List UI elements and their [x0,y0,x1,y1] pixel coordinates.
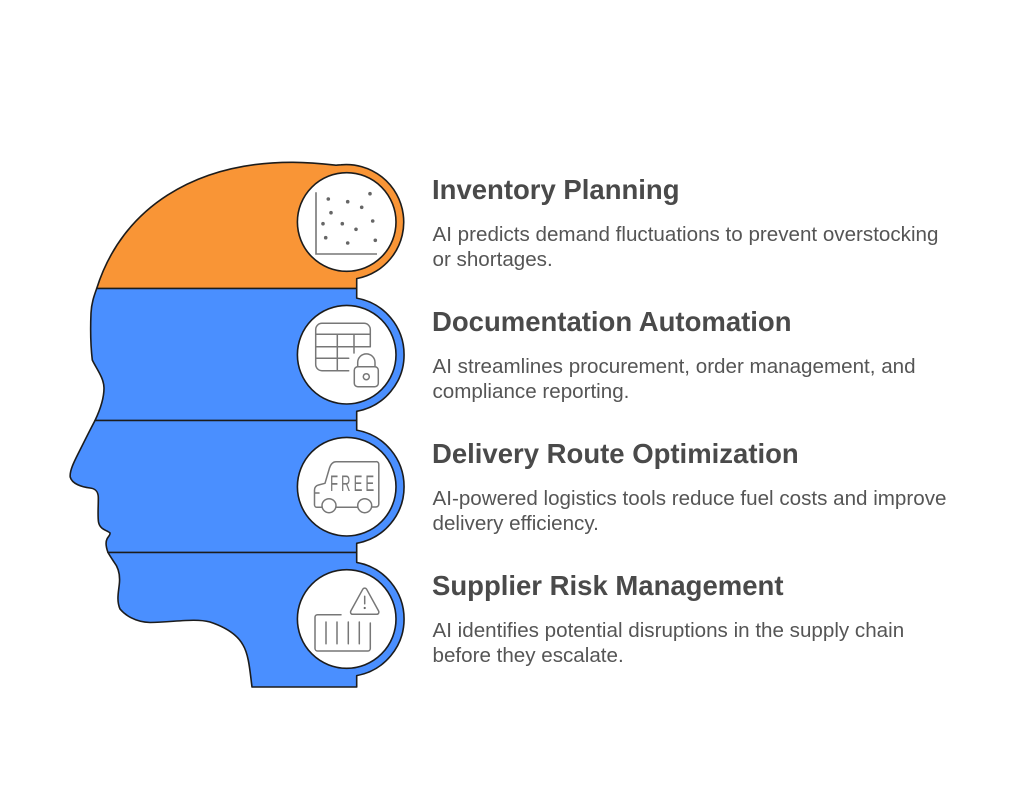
icon circle: scatter plot [297,173,396,271]
description: delivery efficiency. [432,512,599,535]
heading: Supplier Risk Management [432,570,783,601]
segment: forehead (blue) [91,288,404,420]
head diagram [70,162,404,687]
segment: crown (orange) [97,162,404,288]
item: documentation automation [432,306,916,403]
icon circle: barcode with warning [297,570,396,668]
icon circle: table with lock [297,305,396,404]
heading: Inventory Planning [432,174,680,205]
description: AI predicts demand fluctuations to prevent overstocking [432,223,938,246]
heading: Documentation Automation [432,306,792,337]
description: AI identifies potential disruptions in the supply chain [432,619,904,642]
icon circle: free delivery truck: FREE [330,472,377,496]
description: AI-powered logistics tools reduce fuel costs and improve [432,487,946,510]
segment: nose (blue) [70,420,404,552]
item: delivery route optimization [432,438,946,535]
description: compliance reporting. [432,380,629,403]
description: or shortages. [432,248,553,271]
heading: Delivery Route Optimization [432,438,799,469]
icon circle: free delivery truck [297,437,396,536]
description: AI streamlines procurement, order management, and [432,355,916,378]
segment: jaw (blue) [108,552,404,687]
item: supplier risk management [432,570,904,667]
item: inventory planning [432,174,938,271]
description: before they escalate. [432,644,624,667]
